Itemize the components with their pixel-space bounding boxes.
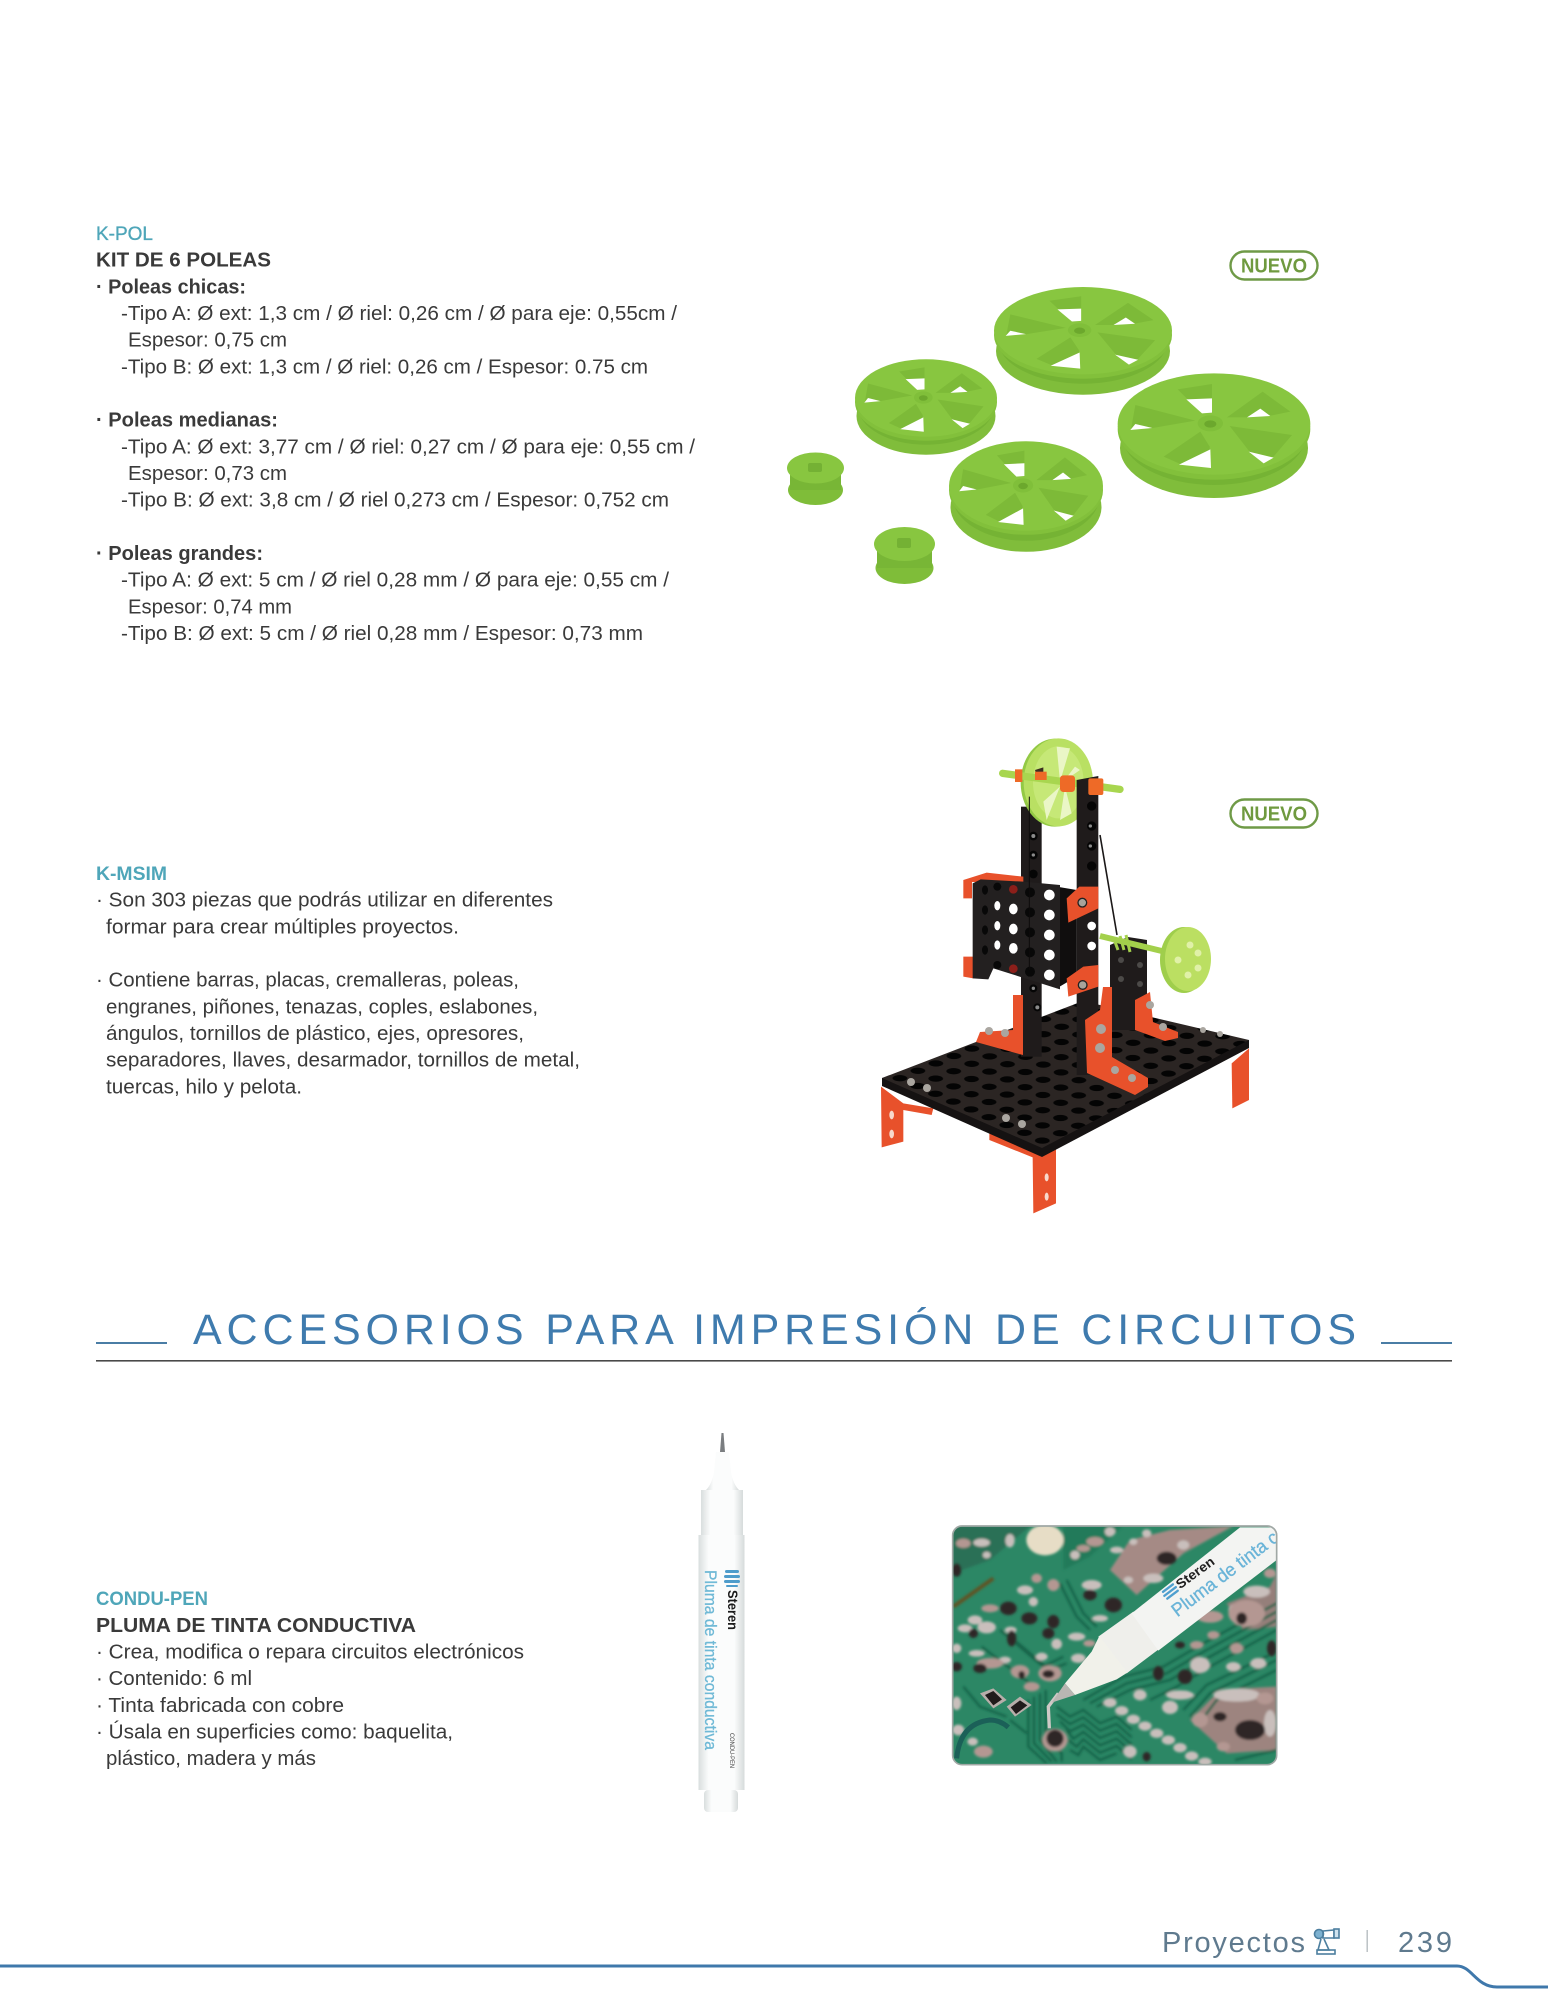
large pulleys specs: -Tipo B: Ø ext: 5 cm / Ø riel 0,28 mm / Espesor: 0,73 mm (121, 623, 643, 645)
first bullet: · Son 303 piezas que podrás utilizar en diferentes (96, 890, 553, 912)
pen logo in photo (1162, 1583, 1179, 1600)
panel: K-MSIM kit description (96, 864, 580, 1098)
wire (957, 1720, 1008, 1758)
block hole row: red reflections (1009, 885, 1018, 973)
second bullet: separadores, llaves, desarmador, tornillos de metal, (106, 1050, 580, 1072)
pen body (698, 1535, 744, 1790)
illustration: mechanism model built from black and orange pieces (881, 738, 1249, 1213)
small pulleys specs: Espesor: 0,75 cm (128, 330, 287, 352)
pulley: right large (1118, 373, 1310, 498)
pink solder (956, 1537, 1276, 1758)
first bullet: formar para crear múltiples proyectos. (106, 916, 459, 938)
pen cap collar (701, 1490, 743, 1535)
feature list: · Tinta fabricada con cobre (96, 1695, 344, 1717)
pulley: center low (949, 441, 1103, 552)
small pulleys specs: · Poleas chicas: (96, 276, 246, 298)
large pulleys specs (96, 543, 669, 645)
pen nose cone (706, 1452, 739, 1490)
orange clamps on right column (1067, 887, 1098, 997)
tower with block and top pulley (963, 738, 1120, 1075)
left column holes (1029, 832, 1041, 1011)
photo: pen drawing on a green circuit board (951, 1525, 1282, 1766)
icon: robot arm (1314, 1929, 1339, 1954)
orange axle collars (1015, 769, 1103, 795)
feature list: · Úsala en superficies como: baquelita, (96, 1720, 453, 1744)
surface-mount chips (980, 1688, 1032, 1717)
second bullet (96, 970, 580, 1098)
pen label: product name: Pluma de tinta conductiva (701, 1570, 720, 1751)
medium pulleys specs: Espesor: 0,73 cm (128, 463, 287, 485)
traces (963, 1580, 1277, 1763)
black perforated block (973, 879, 1060, 989)
pen product text in photo: Pluma de tinta c (1167, 1527, 1282, 1621)
string (1100, 835, 1117, 935)
left column (1021, 807, 1042, 1057)
board background (953, 1526, 1277, 1765)
heading right dash (1381, 1342, 1452, 1344)
medium pulleys specs (96, 410, 695, 512)
page number: 239 (1398, 1927, 1452, 1959)
feature list: plástico, madera y más (106, 1748, 316, 1770)
heading underline (96, 1360, 1452, 1362)
heading title: ACCESORIOS PARA IMPRESIÓN DE CIRCUITOS (193, 1306, 1356, 1354)
product code K-MSIM: K-MSIM (96, 864, 167, 885)
large pulleys specs: · Poleas grandes: (96, 543, 263, 565)
lower axle (1100, 936, 1170, 953)
medium pulleys specs: -Tipo A: Ø ext: 3,77 cm / Ø riel: 0,27 cm / Ø para eje: 0,55 cm / (121, 436, 695, 458)
feature list: · Contenido: 6 ml (96, 1668, 252, 1690)
product title: PLUMA DE TINTA CONDUCTIVA (96, 1615, 416, 1637)
block see-through holes (994, 890, 1096, 980)
small pulleys specs: -Tipo A: Ø ext: 1,3 cm / Ø riel: 0,26 cm / Ø para eje: 0,55cm / (121, 303, 677, 325)
legs (881, 1048, 1249, 1213)
large pulleys specs: Espesor: 0,74 mm (128, 596, 292, 618)
pen cuff in photo (1098, 1612, 1160, 1673)
short tower holes (1118, 957, 1143, 987)
green top pulley (1021, 738, 1093, 827)
large pulleys specs: -Tipo A: Ø ext: 5 cm / Ø riel 0,28 mm / Ø para eje: 0,55 cm / (121, 570, 669, 592)
pen nose in photo (1065, 1636, 1127, 1695)
right column (1077, 776, 1098, 1075)
footer (0, 1927, 1548, 1987)
hole highlights (1031, 824, 1092, 1009)
badge: NUEVO for pulleys: NUEVO (1241, 256, 1307, 278)
green lower pulley (1160, 927, 1211, 993)
medium pulleys specs: -Tipo B: Ø ext: 3,8 cm / Ø riel 0,273 cm / Espesor: 0,752 cm (121, 490, 669, 512)
footer curved line (0, 1966, 1548, 1987)
pen metal tip (720, 1433, 725, 1452)
perforated base plate (882, 1001, 1249, 1148)
pulley: small bottom (874, 527, 935, 584)
block hole row: dark (982, 883, 1035, 977)
blurred board detail (951, 1525, 1277, 1766)
badge: NUEVO for pulleys (1230, 252, 1318, 280)
pen metal nib in photo (1052, 1683, 1075, 1703)
short tower (1110, 937, 1147, 1030)
illustration: six green pulleys (787, 287, 1310, 584)
silver solder (952, 1527, 1276, 1766)
feature list (96, 1642, 524, 1770)
orange L brackets (976, 987, 1178, 1095)
heading left dash (96, 1342, 167, 1344)
section name: Proyectos (1162, 1927, 1305, 1959)
pen barrel in photo (1132, 1527, 1277, 1651)
pen logo mark (724, 1570, 740, 1587)
first bullet (96, 890, 553, 938)
pen small model code: CONDU-PEN (728, 1733, 734, 1768)
second bullet: · Contiene barras, placas, cremalleras, poleas, (96, 970, 519, 992)
feature list: · Crea, modifica o repara circuitos electrónicos (96, 1642, 524, 1664)
top axle (1003, 773, 1120, 789)
right column holes (1087, 801, 1096, 871)
small pulleys specs: -Tipo B: Ø ext: 1,3 cm / Ø riel: 0,26 cm / Espesor: 0.75 cm (121, 356, 648, 378)
second bullet: engranes, piñones, tenazas, coples, eslabones, (106, 996, 538, 1018)
product code CONDU-PEN: CONDU-PEN (96, 1589, 208, 1610)
pulley: small left (787, 452, 844, 505)
pulley: middle left (855, 359, 997, 455)
string on left column (1028, 797, 1031, 970)
photo border (953, 1526, 1277, 1765)
panel: K-POL pulley kit description (96, 224, 695, 645)
panel: CONDU-PEN description (96, 1589, 524, 1770)
trace being drawn (1048, 1693, 1058, 1728)
black block side (1057, 887, 1077, 988)
illustration: conductive ink pen (698, 1433, 744, 1812)
pen end cap (704, 1790, 738, 1812)
badge: NUEVO for mechanism kit: NUEVO (1241, 804, 1307, 826)
pulley: top large (994, 287, 1172, 395)
pen brand text in photo: Steren (1173, 1554, 1217, 1592)
medium pulleys specs: · Poleas medianas: (96, 410, 278, 432)
second bullet: ángulos, tornillos de plástico, ejes, opresores, (106, 1023, 524, 1045)
product title: KIT DE 6 POLEAS (96, 250, 271, 272)
orange back bracket (963, 873, 1023, 898)
small pulleys specs (96, 276, 677, 378)
thread coils (1114, 935, 1130, 952)
second bullet: tuercas, hilo y pelota. (106, 1076, 302, 1098)
clamp screws (1078, 898, 1087, 989)
badge: NUEVO for mechanism kit (1230, 800, 1318, 828)
footer separator (1366, 1930, 1368, 1952)
pen logo text: Steren (725, 1590, 741, 1630)
base plate edge (882, 1040, 1249, 1157)
product code K-POL: K-POL (96, 224, 153, 245)
dark solder points (951, 1552, 1276, 1761)
bracket screws (907, 1001, 1223, 1128)
